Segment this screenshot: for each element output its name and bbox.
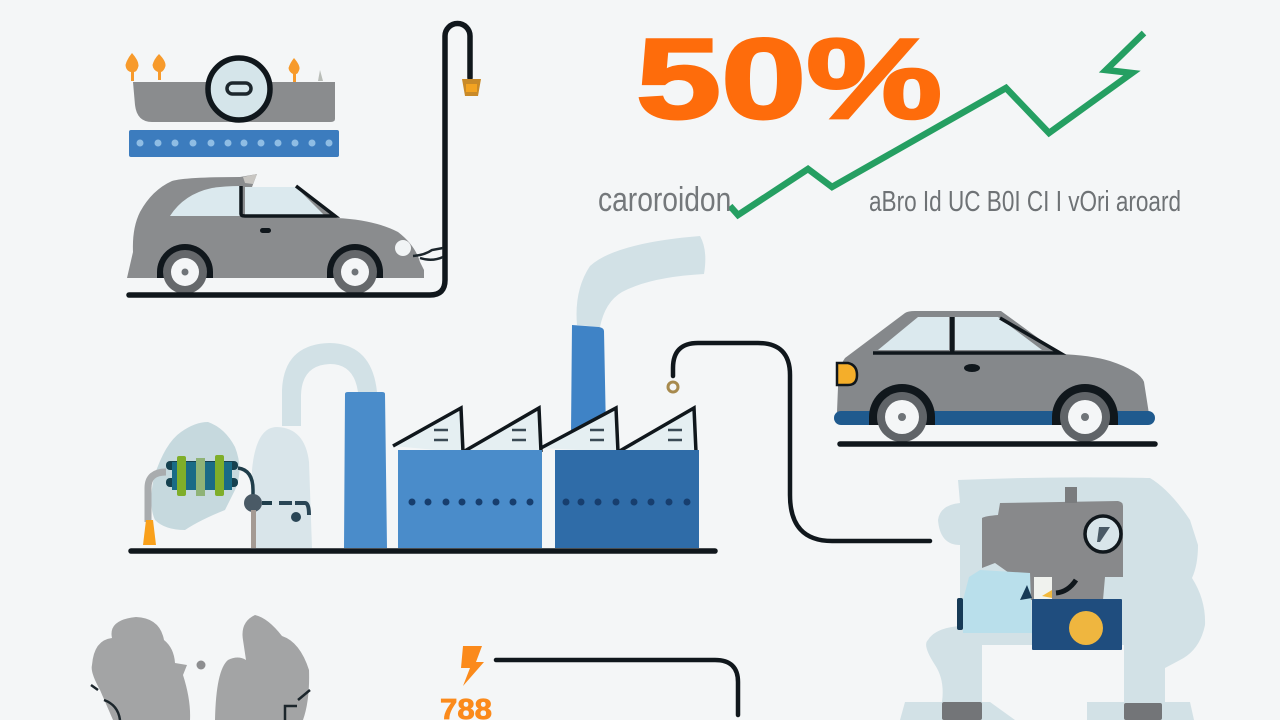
label left: caroroidon xyxy=(598,181,731,219)
icon: cable end ring xyxy=(668,382,678,392)
ice box xyxy=(957,570,1032,633)
connector cable to engine xyxy=(673,343,930,541)
line chart: green trend xyxy=(730,33,1144,215)
icon: lightning bolt xyxy=(461,646,484,686)
window dots xyxy=(408,498,690,506)
panel: top-left heater unit xyxy=(126,53,339,157)
centre dot xyxy=(196,660,206,670)
panel: people silhouettes xyxy=(91,615,310,720)
smoke plumes xyxy=(151,236,705,548)
panel: factory scene xyxy=(131,236,715,551)
hose detail xyxy=(1034,577,1076,599)
big stat: 50% xyxy=(636,15,942,143)
gauge circle xyxy=(208,58,270,120)
charging cable xyxy=(129,23,470,295)
car windows xyxy=(873,317,1060,372)
car wheels xyxy=(157,244,383,294)
sawtooth roofs xyxy=(393,408,696,452)
coin xyxy=(1069,611,1103,645)
car body xyxy=(837,311,1149,414)
ground line xyxy=(131,548,715,554)
panel: top-left car plugged in xyxy=(127,23,481,295)
right silhouette xyxy=(215,615,309,720)
blue sill xyxy=(834,411,1155,425)
panel: engine xyxy=(900,477,1205,720)
vapour cloud xyxy=(900,477,1205,720)
chimney short xyxy=(344,392,387,548)
icon: orange plug xyxy=(462,79,481,96)
feet xyxy=(942,702,1162,720)
chimney tall xyxy=(571,325,606,432)
coil machine xyxy=(143,455,309,548)
engine block xyxy=(982,501,1123,600)
plug connector to car xyxy=(413,248,443,260)
roof window marks xyxy=(434,430,682,440)
gauge xyxy=(1085,516,1121,552)
battery box xyxy=(1032,599,1122,650)
left silhouette xyxy=(92,617,190,720)
gray tank xyxy=(133,82,335,122)
car wheels xyxy=(869,384,1118,442)
car windows xyxy=(170,174,411,256)
building right xyxy=(555,450,699,548)
icon: flames xyxy=(126,53,323,82)
building left xyxy=(398,450,542,548)
label right: aBro Id UC B0I CI I vOri aroard xyxy=(869,186,1181,218)
tail light xyxy=(837,363,857,385)
blue dotted bar xyxy=(129,130,339,157)
engine cap xyxy=(1065,487,1077,503)
bottom cable xyxy=(496,660,738,715)
ground line xyxy=(840,441,1155,447)
silhouette straps xyxy=(91,685,310,720)
panel: right car xyxy=(834,311,1155,444)
car body xyxy=(127,174,424,278)
